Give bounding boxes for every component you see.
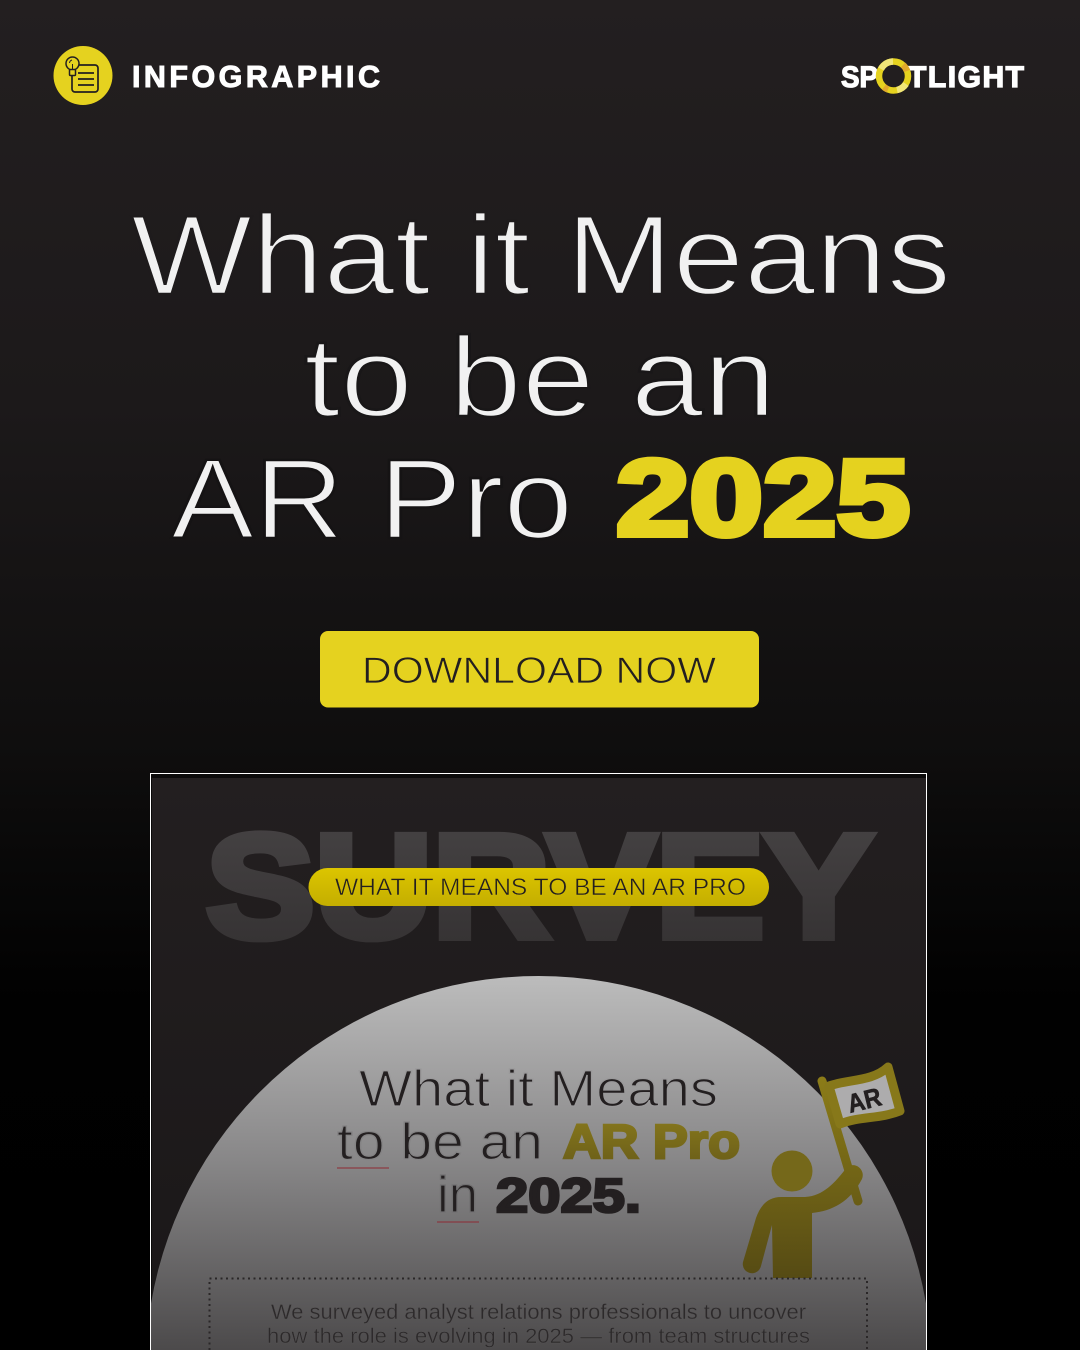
panel heading (337, 1060, 740, 1223)
title: What it Means (131, 192, 951, 318)
button: download now (320, 631, 759, 708)
flag label: AR (844, 1081, 885, 1119)
heading highlight: 2025: 2025. (496, 1170, 641, 1223)
semicircle backdrop (151, 976, 926, 1350)
header logo: spotlight (841, 61, 1024, 94)
pill label (308, 868, 769, 906)
title: to be an (304, 314, 776, 440)
panel: survey preview (150, 774, 926, 1350)
brand text: infographic: INFOGRAPHIC (132, 60, 380, 94)
panel heading: What it Means (359, 1060, 718, 1117)
heading highlight: ar pro: AR Pro (563, 1116, 740, 1169)
header logo: spotlight: TLIGHT (908, 61, 1024, 94)
title (131, 192, 951, 562)
background word: survey: SURVEY (206, 805, 873, 969)
panel heading: in (437, 1166, 478, 1223)
intro paragraph: We surveyed analyst relations professionals to uncover (271, 1301, 806, 1324)
icon: spotlight ring (879, 62, 908, 90)
person body (743, 1165, 863, 1278)
intro paragraph (267, 1301, 810, 1348)
header logo: infographic (54, 46, 380, 105)
title highlight: 2025: 2025 (616, 437, 910, 558)
header logo: spotlight: SP (841, 61, 878, 94)
pill label: WHAT IT MEANS TO BE AN AR PRO (335, 874, 746, 901)
intro paragraph: how the role is evolving in 2025 — from team structures (267, 1325, 810, 1348)
person head (772, 1150, 812, 1192)
figure holding ar flag (743, 1067, 900, 1278)
title: AR Pro (171, 436, 573, 562)
dotted text box (210, 1278, 867, 1350)
icon: lightbulb and document (54, 46, 112, 105)
flag (829, 1067, 900, 1124)
panel heading: to be an (337, 1113, 543, 1170)
flag pole (822, 1081, 858, 1201)
button: download now: DOWNLOAD NOW (362, 650, 716, 691)
